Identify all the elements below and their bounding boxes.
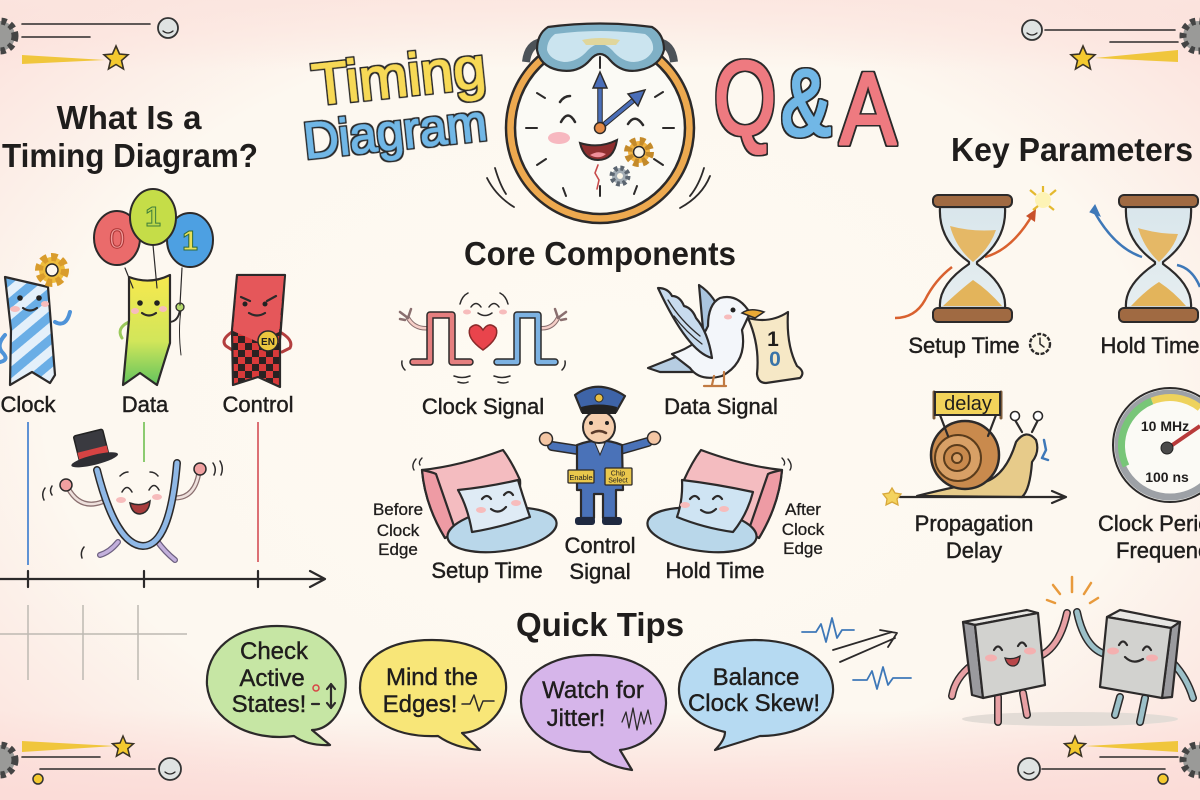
speech bubble: mind the edges: Edges!	[383, 691, 457, 718]
icon: clock hands	[593, 72, 645, 134]
arrow: propagation delay	[883, 488, 1066, 505]
speech bubble: check active states: Active	[239, 665, 305, 692]
icon: clock face	[548, 96, 643, 189]
icon: control ribbon	[224, 275, 291, 387]
icon: balloons 0 1 1	[94, 189, 213, 305]
icon: hold time hourglass	[1090, 195, 1200, 322]
title word: Q&A: &	[781, 50, 831, 155]
icon: balloons 0 1 1: 0	[109, 223, 125, 254]
label: hold time: Hold Time	[1100, 333, 1200, 358]
icon: control signal police officer: Chip	[611, 470, 625, 478]
speech bubble: balance clock skew	[679, 640, 833, 750]
speech bubble: mind the edges: Mind the	[386, 664, 478, 691]
label: setup time: Setup Time	[431, 558, 543, 583]
icon: control ribbon: EN	[261, 337, 275, 348]
icon: control signal police officer: Select	[608, 478, 628, 484]
label: hold time: Hold Time	[665, 558, 765, 583]
icon: setup time hourglass	[895, 186, 1056, 322]
icon: balloons 0 1 1: 1	[145, 201, 161, 232]
label: after clock edge: Edge	[783, 539, 823, 558]
title word: Timing: Timing	[309, 35, 489, 118]
panel: quick tips	[207, 606, 911, 770]
heading: core components: Core Components	[464, 235, 736, 272]
icon: balloons 0 1 1: 1	[182, 225, 198, 256]
panel: key parameters	[883, 131, 1200, 563]
chip character: left	[952, 610, 1067, 722]
icon: control signal police officer: Enable	[569, 473, 593, 482]
icon: top hat	[65, 427, 119, 470]
label: before clock edge: Edge	[378, 540, 418, 559]
icon: clock period gauge: 100 ns	[1145, 469, 1189, 485]
icon: clock period gauge	[1113, 388, 1200, 502]
icon: scroll with binary digits: 1	[767, 328, 779, 351]
speech bubble: watch for jitter: Jitter!	[547, 705, 605, 732]
label: after clock edge: After	[785, 500, 821, 519]
label: after clock edge	[782, 500, 825, 558]
speech bubble: balance clock skew: Clock Skew!	[688, 690, 820, 717]
corner decoration: bottom left	[0, 736, 181, 784]
icon: signal waves and arrows	[802, 618, 911, 689]
icon: small stopwatch	[1030, 334, 1050, 354]
icon: setup time pillows	[413, 450, 559, 558]
icon: dancing clock edge character	[43, 427, 222, 560]
corner decoration: top right	[1022, 20, 1200, 69]
label: control signal: Signal	[569, 559, 631, 584]
label: clock signal: Clock Signal	[422, 394, 544, 419]
label: control: Control	[223, 392, 293, 417]
label: after clock edge: Clock	[782, 520, 825, 539]
speech bubble: check active states: Check	[240, 638, 309, 665]
label: data: Data	[122, 392, 169, 417]
label: clock: Clock	[0, 392, 57, 417]
panel: what is a timing diagram	[0, 99, 325, 680]
heading: what is a timing diagram: What Is a	[57, 99, 202, 136]
icon: clock mascot with goggles	[487, 24, 710, 223]
label: control signal: Control	[565, 533, 635, 558]
title word: Q&A: Q	[714, 41, 776, 157]
speech bubble: watch for jitter	[521, 655, 666, 770]
label: data signal: Data Signal	[664, 394, 778, 419]
speech bubble: mind the edges	[360, 640, 506, 750]
icon: data ribbon	[120, 275, 184, 385]
icon: snail with delay sign: delay	[944, 393, 992, 415]
chip character: right	[1077, 610, 1193, 722]
icon: scroll with binary digits: 0	[769, 348, 781, 371]
icon: goggles	[526, 24, 674, 71]
icon: snail with delay sign	[917, 392, 1048, 497]
icon: clock signal with heart	[400, 293, 566, 383]
label: clock period and frequency	[1098, 511, 1200, 563]
corner decoration: top left	[0, 18, 178, 69]
title word: Q&A	[714, 41, 896, 166]
label: propagation delay	[915, 511, 1033, 563]
title	[301, 35, 896, 170]
title word: Diagram: Diagram	[301, 94, 490, 170]
icon: clock period gauge: 10 MHz	[1141, 418, 1189, 434]
faded grid	[0, 605, 187, 680]
title word: Q&A: A	[840, 52, 896, 166]
label: setup time: Setup Time	[908, 333, 1020, 358]
icon: hold time pillows	[645, 450, 791, 558]
heading: key parameters: Key Parameters	[951, 131, 1193, 168]
icon: high-fiving chips	[952, 577, 1193, 726]
heading: quick tips: Quick Tips	[516, 606, 684, 643]
heading: what is a timing diagram	[2, 99, 258, 174]
speech bubble: check active states	[207, 626, 346, 745]
icon: scroll with binary digits	[748, 312, 802, 383]
icon: control signal police officer	[540, 387, 660, 525]
heading: what is a timing diagram: Timing Diagram?	[2, 137, 258, 174]
icon: gold gear	[628, 141, 650, 163]
icon: clock ribbon with gear	[0, 257, 70, 385]
label: before clock edge: Clock	[377, 521, 420, 540]
corner decoration: bottom right	[1018, 736, 1200, 784]
icon: dove carrying scroll	[648, 285, 802, 386]
speech bubble: check active states: States!	[232, 691, 306, 718]
label: before clock edge: Before	[373, 500, 423, 519]
icon: grey gear	[612, 168, 628, 184]
speech bubble: balance clock skew: Balance	[713, 664, 799, 691]
panel: core components	[373, 235, 825, 584]
label: propagation delay: Propagation	[915, 511, 1033, 536]
label: propagation delay: Delay	[946, 538, 1002, 563]
label: control signal	[565, 533, 635, 584]
label: before clock edge	[373, 500, 423, 559]
timing diagram axis	[0, 422, 325, 587]
speech bubble: watch for jitter: Watch for	[542, 677, 644, 704]
